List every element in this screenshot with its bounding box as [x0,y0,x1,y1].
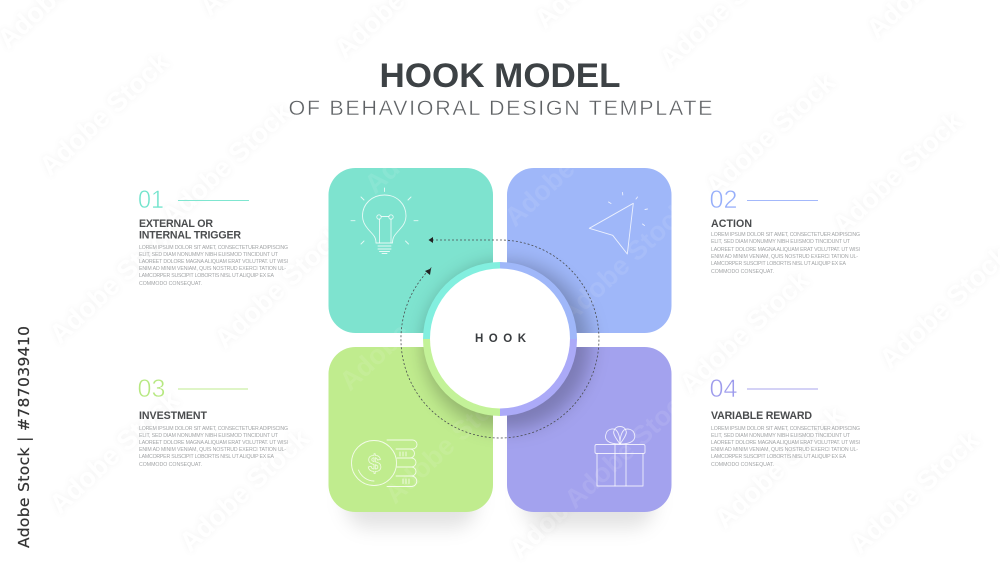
card watermarks: Adobe Stock [379,374,520,509]
watermark pattern: Adobe Stock [44,214,185,349]
watermark pattern: Adobe Stock [209,219,350,354]
watermark pattern: Adobe Stock [827,105,968,240]
body 04: LAOREET DOLORE MAGNA ALIQUAM ERAT VOLUTPAT. UT WISI [711,440,860,446]
number 03: 03 [138,375,166,403]
body 04: LOREM IPSUM DOLOR SIT AMET, CONSECTETUER ADIPISCING [711,426,860,432]
panel: step 03 text [138,375,288,468]
body 03: ENIM AD MINIM VENIAM, QUIS NOSTRUD EXERCI TATION UL- [139,447,286,453]
watermark pattern: Adobe Stock [44,384,185,519]
body 03: ELIT, SED DIAM NONUMMY NIBH EUISMOD TINCIDUNT UT [139,433,279,439]
body 02: COMMODO CONSEQUAT. [711,269,774,275]
watermark pattern: Adobe Stock [709,399,850,534]
body 04: LAMCORPER SUSCIPIT LOBORTIS NISL UT ALIQUIP EX EA [711,454,847,460]
centre disc [430,268,570,408]
watermark pattern: Adobe Stock [174,422,315,557]
centre ring [423,262,577,416]
subtitle: OF BEHAVIORAL DESIGN TEMPLATE [288,96,712,120]
body 03: COMMODO CONSEQUAT. [139,462,202,468]
panel: reward card [507,347,672,512]
body 02: ELIT, SED DIAM NONUMMY NIBH EUISMOD TINCIDUNT UT [711,239,851,245]
body 04: ELIT, SED DIAM NONUMMY NIBH EUISMOD TINCIDUNT UT [711,433,851,439]
watermark pattern: Adobe Stock [34,46,175,181]
watermark pattern: Adobe Stock [700,66,841,201]
centre label: HOOK [475,333,527,345]
card watermarks: Adobe Stock [554,194,695,329]
heading 01: EXTERNAL OR [139,218,213,230]
body 01: LAMCORPER SUSCIPIT LOBORTIS NISL UT ALIQUIP EX EA [139,273,275,279]
number 02: 02 [710,186,738,214]
arrowhead left [425,268,431,275]
body 01: LAOREET DOLORE MAGNA ALIQUAM ERAT VOLUTPAT. UT WISI [139,259,288,265]
panel: investment card [328,347,493,512]
panel: action card [507,168,672,333]
panel: step 01 text [138,186,288,287]
panel: step 02 text [710,186,860,275]
card watermarks [334,153,700,514]
centre circle shadow [423,262,591,430]
watermark pattern: Adobe Stock [844,424,985,559]
heading 02: ACTION [711,218,752,230]
card watermarks: Adobe [334,317,416,396]
body 02: LAOREET DOLORE MAGNA ALIQUAM ERAT VOLUTPAT. UT WISI [711,247,860,253]
number 04: 04 [710,375,738,403]
watermark pattern: Adobe Stock [504,429,645,563]
body 04: ENIM AD MINIM VENIAM, QUIS NOSTRUD EXERCI TATION UL- [711,447,858,453]
icon: gift box [595,426,645,486]
icon: coin stack with dollar [352,440,417,486]
body 03: LOREM IPSUM DOLOR SIT AMET, CONSECTETUER ADIPISCING [139,426,288,432]
body 03: LAMCORPER SUSCIPIT LOBORTIS NISL UT ALIQUIP EX EA [139,454,275,460]
body 02: LOREM IPSUM DOLOR SIT AMET, CONSECTETUER ADIPISCING [711,232,860,238]
heading 03: INVESTMENT [139,410,208,422]
panel: trigger card [328,168,493,333]
body 01: ELIT, SED DIAM NONUMMY NIBH EUISMOD TINCIDUNT UT [139,252,279,258]
watermark pattern: Adobe Stock [674,264,815,399]
number 01: 01 [138,186,164,214]
body 03: LAOREET DOLORE MAGNA ALIQUAM ERAT VOLUTPAT. UT WISI [139,440,288,446]
title: HOOK MODEL [380,57,620,95]
body 01: ENIM AD MINIM VENIAM, QUIS NOSTRUD EXERCI TATION UL- [139,266,286,272]
body 04: COMMODO CONSEQUAT. [711,462,774,468]
arrowhead top [428,237,433,243]
icon: light bulb [351,188,418,254]
watermark pattern: Adobe Stock [156,96,297,231]
body 02: ENIM AD MINIM VENIAM, QUIS NOSTRUD EXERCI TATION UL- [711,254,858,260]
body 02: LAMCORPER SUSCIPIT LOBORTIS NISL UT ALIQUIP EX EA [711,261,847,267]
stock id vertical label: Adobe Stock | #787039410 [15,326,33,548]
card watermarks: Ad [359,153,405,199]
dashed cycle with arrows [401,237,599,438]
icon: paper plane cursor [589,192,648,254]
heading 01: INTERNAL TRIGGER [139,230,241,242]
card shadows [345,370,655,528]
card watermarks: Adobe [499,153,581,232]
card watermarks: Adobe Stock [559,379,700,514]
icon: coin stack with dollar: $ [368,450,382,478]
body 01: COMMODO CONSEQUAT. [139,281,202,287]
panel: step 04 text [710,375,860,468]
heading 04: VARIABLE REWARD [711,410,812,422]
body 01: LOREM IPSUM DOLOR SIT AMET, CONSECTETUER ADIPISCING [139,245,288,251]
